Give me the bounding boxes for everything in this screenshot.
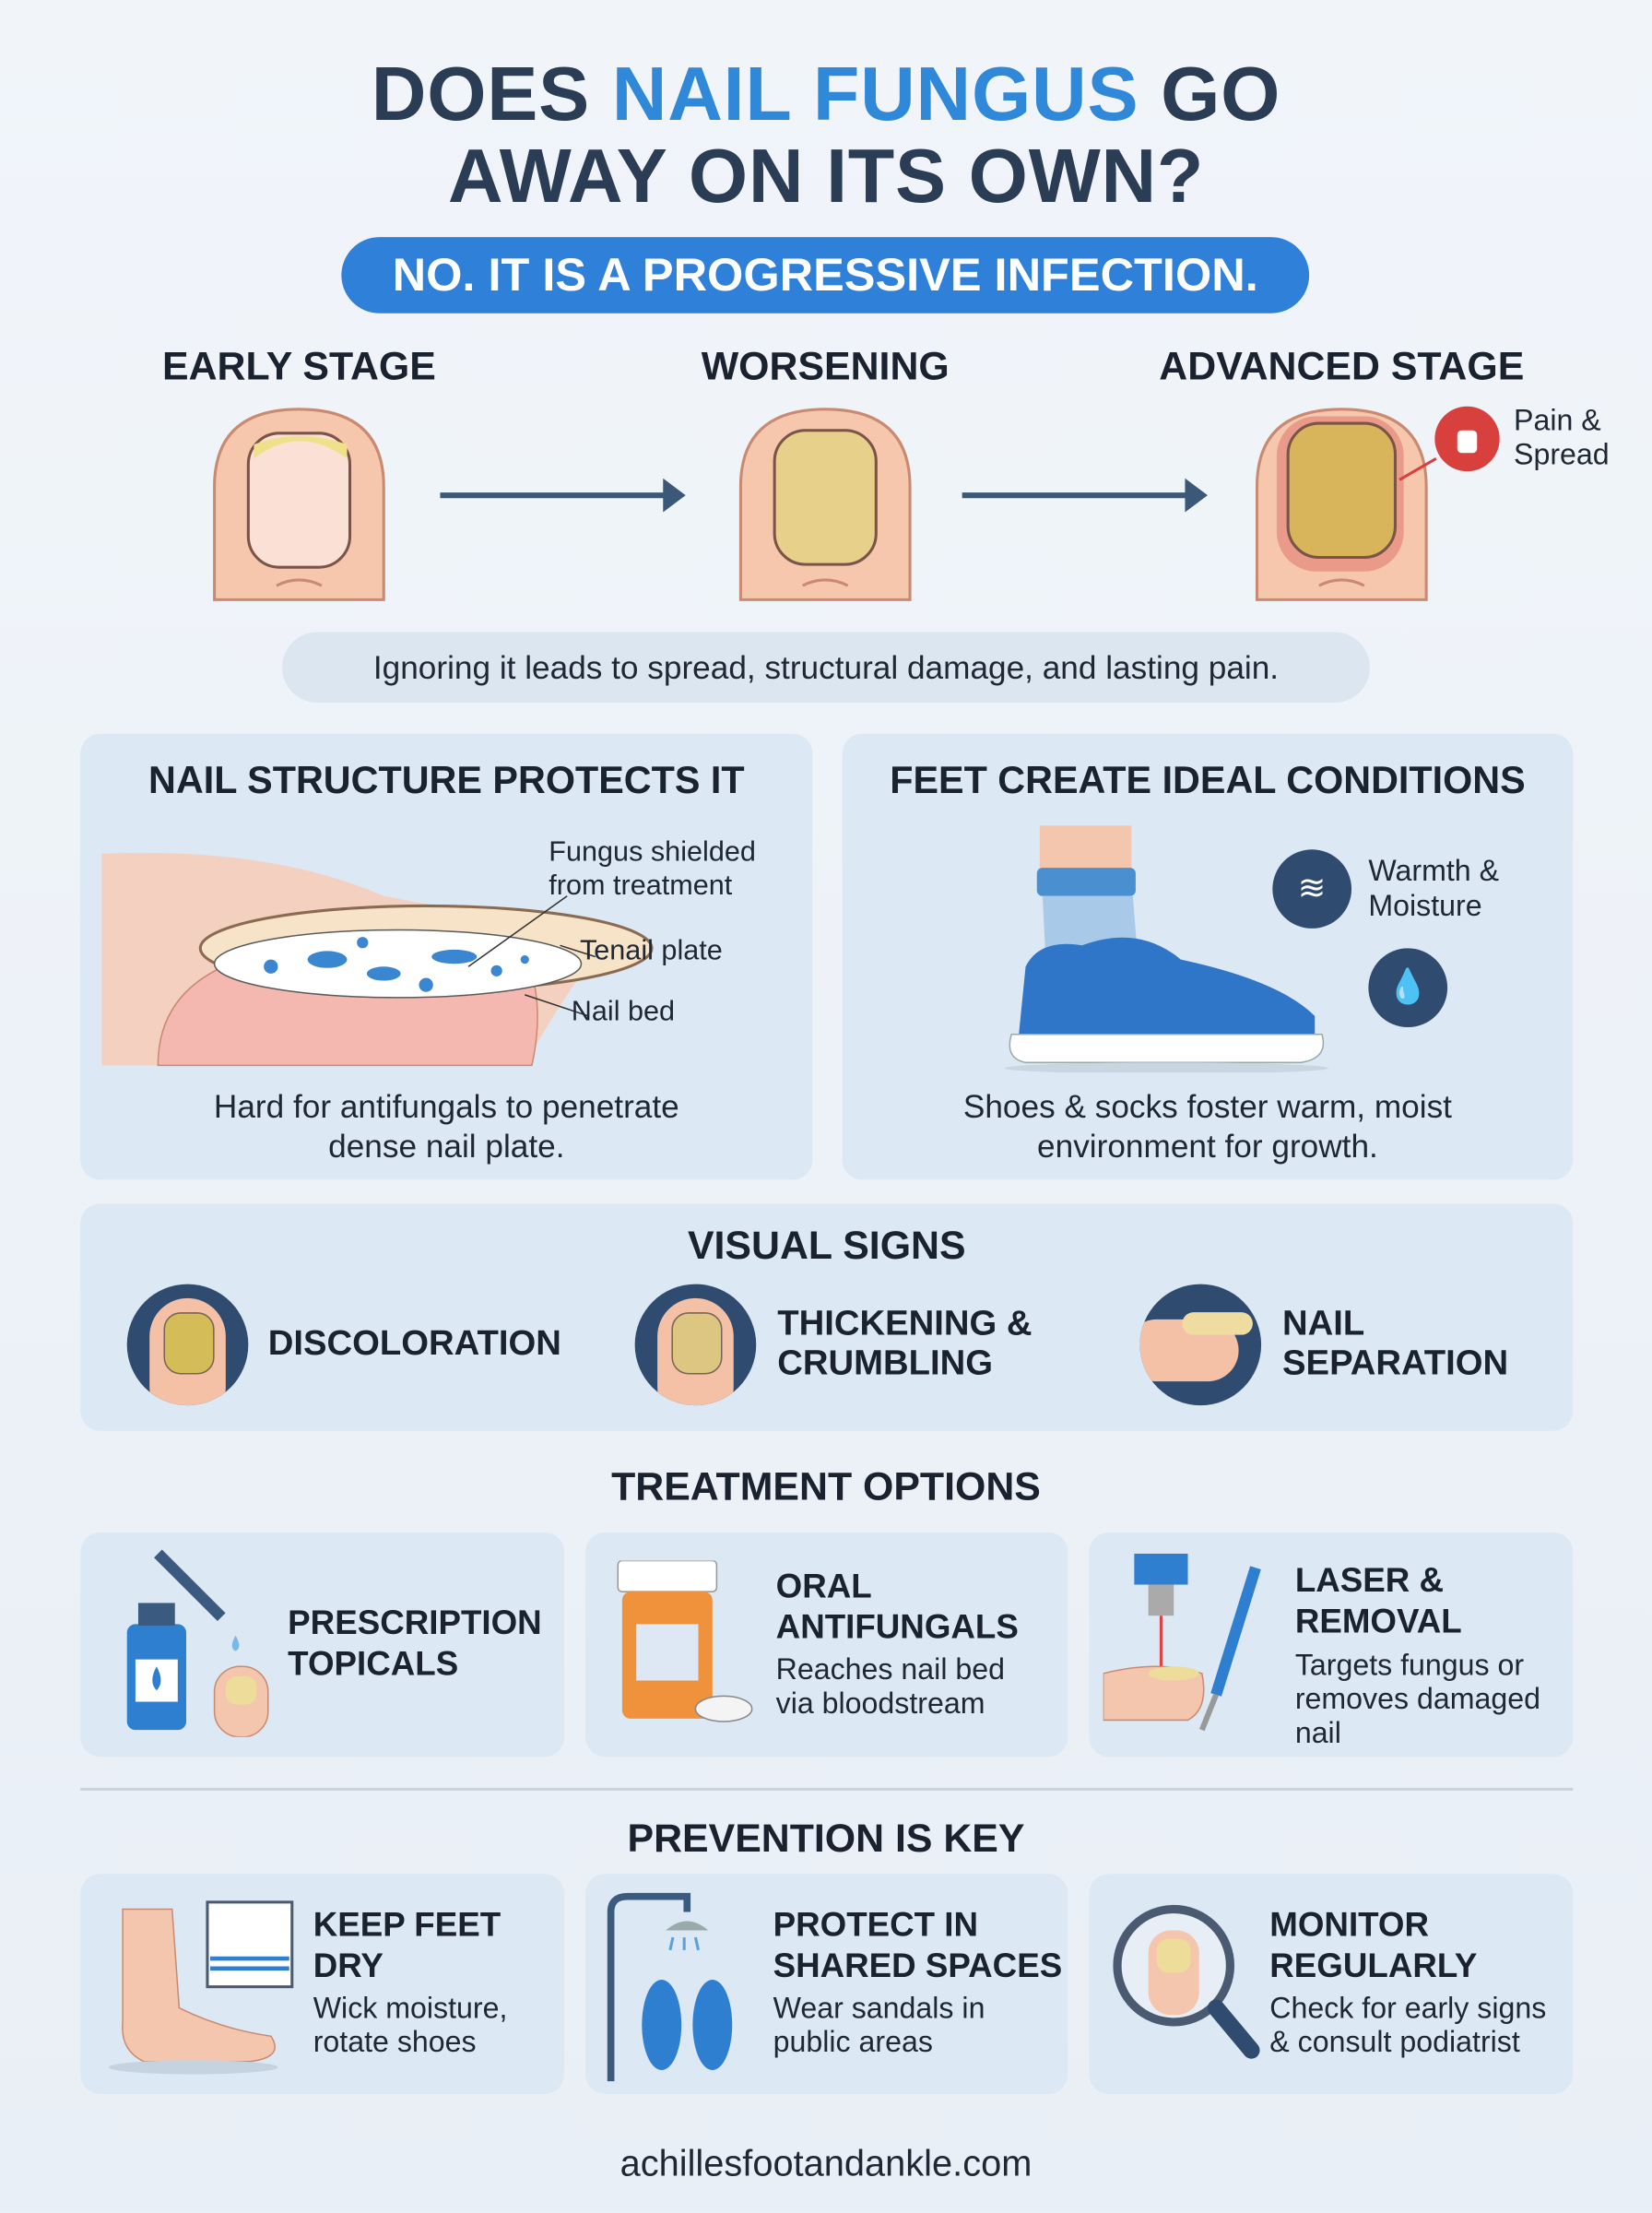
card: oral: via bloodstream	[776, 1687, 985, 1720]
toe early	[215, 409, 384, 599]
card: keep feet dry: Wick moisture,	[313, 1993, 507, 2025]
caption: dense nail plate.	[328, 1128, 565, 1164]
warmth label: Warmth &	[1368, 855, 1499, 888]
card: oral: ORAL	[776, 1568, 872, 1605]
heading: FEET CREATE IDEAL CONDITIONS	[890, 759, 1526, 801]
sign: separation: NAIL	[1282, 1304, 1364, 1343]
card: shared spaces: SHARED SPACES	[773, 1947, 1062, 1985]
title: AWAY ON ITS OWN?	[448, 134, 1204, 219]
shoe illustration	[1005, 825, 1329, 1072]
icon: pain alert	[1399, 407, 1500, 479]
pain label	[1514, 405, 1610, 471]
stage headings: EARLY STAGE	[162, 344, 436, 388]
card: monitor: REGULARLY	[1269, 1947, 1477, 1985]
heading: treatment: TREATMENT OPTIONS	[611, 1464, 1041, 1509]
card: laser: Targets fungus or	[1295, 1650, 1524, 1682]
heading: VISUAL SIGNS	[688, 1224, 966, 1267]
card: topicals: PRESCRIPTION	[288, 1604, 542, 1642]
card: laser: LASER &	[1295, 1562, 1444, 1600]
card: monitor: MONITOR	[1269, 1906, 1429, 1945]
card: keep feet dry: KEEP FEET	[313, 1906, 501, 1945]
heading: prevention: PREVENTION IS KEY	[628, 1816, 1024, 1860]
icon: foot and towel	[109, 1900, 293, 2075]
card: shared spaces	[585, 1874, 1068, 2094]
caption: environment for growth.	[1037, 1128, 1378, 1164]
card: oral: Reaches nail bed	[776, 1654, 1005, 1686]
labels: Fungus shielded	[549, 836, 756, 868]
text: WORSENING	[702, 344, 950, 388]
title	[372, 53, 1280, 219]
panel: nail structure: Tenail plate	[580, 936, 723, 966]
sign: separation	[1139, 1284, 1508, 1405]
labels	[549, 836, 756, 902]
caption	[282, 633, 1370, 703]
icon: pill bottle	[618, 1560, 752, 1722]
sign: discoloration: DISCOLORATION	[268, 1323, 561, 1363]
sign: discoloration	[127, 1284, 561, 1405]
title: DOES NAIL FUNGUS GO	[372, 53, 1280, 136]
card: shared spaces: PROTECT IN	[773, 1906, 978, 1945]
icon: dropper bottle	[127, 1549, 269, 1737]
panel: nail structure: Nail bed	[572, 996, 675, 1027]
sign: thickening	[634, 1284, 1032, 1405]
sign: thickening: THICKENING &	[777, 1304, 1032, 1343]
card: oral	[585, 1533, 1068, 1757]
icon: warmth	[1272, 849, 1351, 929]
card: laser: nail	[1295, 1717, 1341, 1750]
card: laser	[1089, 1533, 1573, 1757]
card: shared spaces: public areas	[773, 2027, 933, 2059]
footer: achillesfootandankle.com	[620, 2142, 1032, 2184]
card: laser: removes damaged	[1295, 1684, 1540, 1716]
warmth label	[1368, 855, 1499, 923]
card: topicals: TOPICALS	[288, 1645, 458, 1684]
stages illustration	[213, 406, 1500, 601]
card: monitor	[1089, 1874, 1573, 2094]
card: laser: REMOVAL	[1295, 1603, 1462, 1641]
card: monitor: & consult podiatrist	[1269, 2027, 1520, 2059]
heading: NAIL STRUCTURE PROTECTS IT	[148, 759, 745, 801]
arrow 2	[962, 479, 1208, 512]
icon: warmth: ≋	[1298, 870, 1327, 907]
toe worsening	[740, 409, 910, 599]
pain label: Pain &	[1514, 405, 1601, 437]
icon: laser and scalpel	[1103, 1553, 1261, 1732]
card: topicals	[80, 1533, 564, 1757]
panel: feet conditions	[843, 734, 1573, 1179]
card: keep feet dry: DRY	[313, 1947, 384, 1985]
caption: Ignoring it leads to spread, structural damage, and lasting pain.	[373, 649, 1279, 686]
pain label: Spread	[1514, 439, 1610, 471]
panel: nail structure	[80, 734, 812, 1179]
subtitle pill	[341, 237, 1309, 314]
subtitle pill: NO. IT IS A PROGRESSIVE INFECTION.	[393, 248, 1258, 301]
icon: drop: 💧	[1386, 968, 1429, 1006]
card: keep feet dry	[80, 1874, 564, 2094]
caption: Hard for antifungals to penetrate	[214, 1088, 679, 1125]
caption	[214, 1088, 679, 1164]
caption	[963, 1088, 1452, 1164]
sign: separation: SEPARATION	[1282, 1343, 1508, 1383]
card: shared spaces: Wear sandals in	[773, 1993, 985, 2025]
card: oral: ANTIFUNGALS	[776, 1609, 1019, 1647]
icon: magnifier	[1113, 1905, 1259, 2059]
nail cross-section diagram	[101, 852, 653, 1066]
warmth label: Moisture	[1368, 891, 1482, 923]
toe advanced	[1257, 409, 1426, 599]
icon: shower and sandals	[607, 1892, 732, 2082]
card: monitor: Check for early signs	[1269, 1993, 1546, 2025]
text: ADVANCED STAGE	[1159, 344, 1524, 388]
arrow 1	[440, 479, 686, 512]
card: keep feet dry: rotate shoes	[313, 2027, 477, 2059]
panel: visual signs	[80, 1203, 1573, 1431]
labels: from treatment	[549, 870, 732, 902]
sign: thickening: CRUMBLING	[777, 1343, 993, 1383]
icon: drop	[1368, 948, 1447, 1027]
caption: Shoes & socks foster warm, moist	[963, 1088, 1452, 1125]
